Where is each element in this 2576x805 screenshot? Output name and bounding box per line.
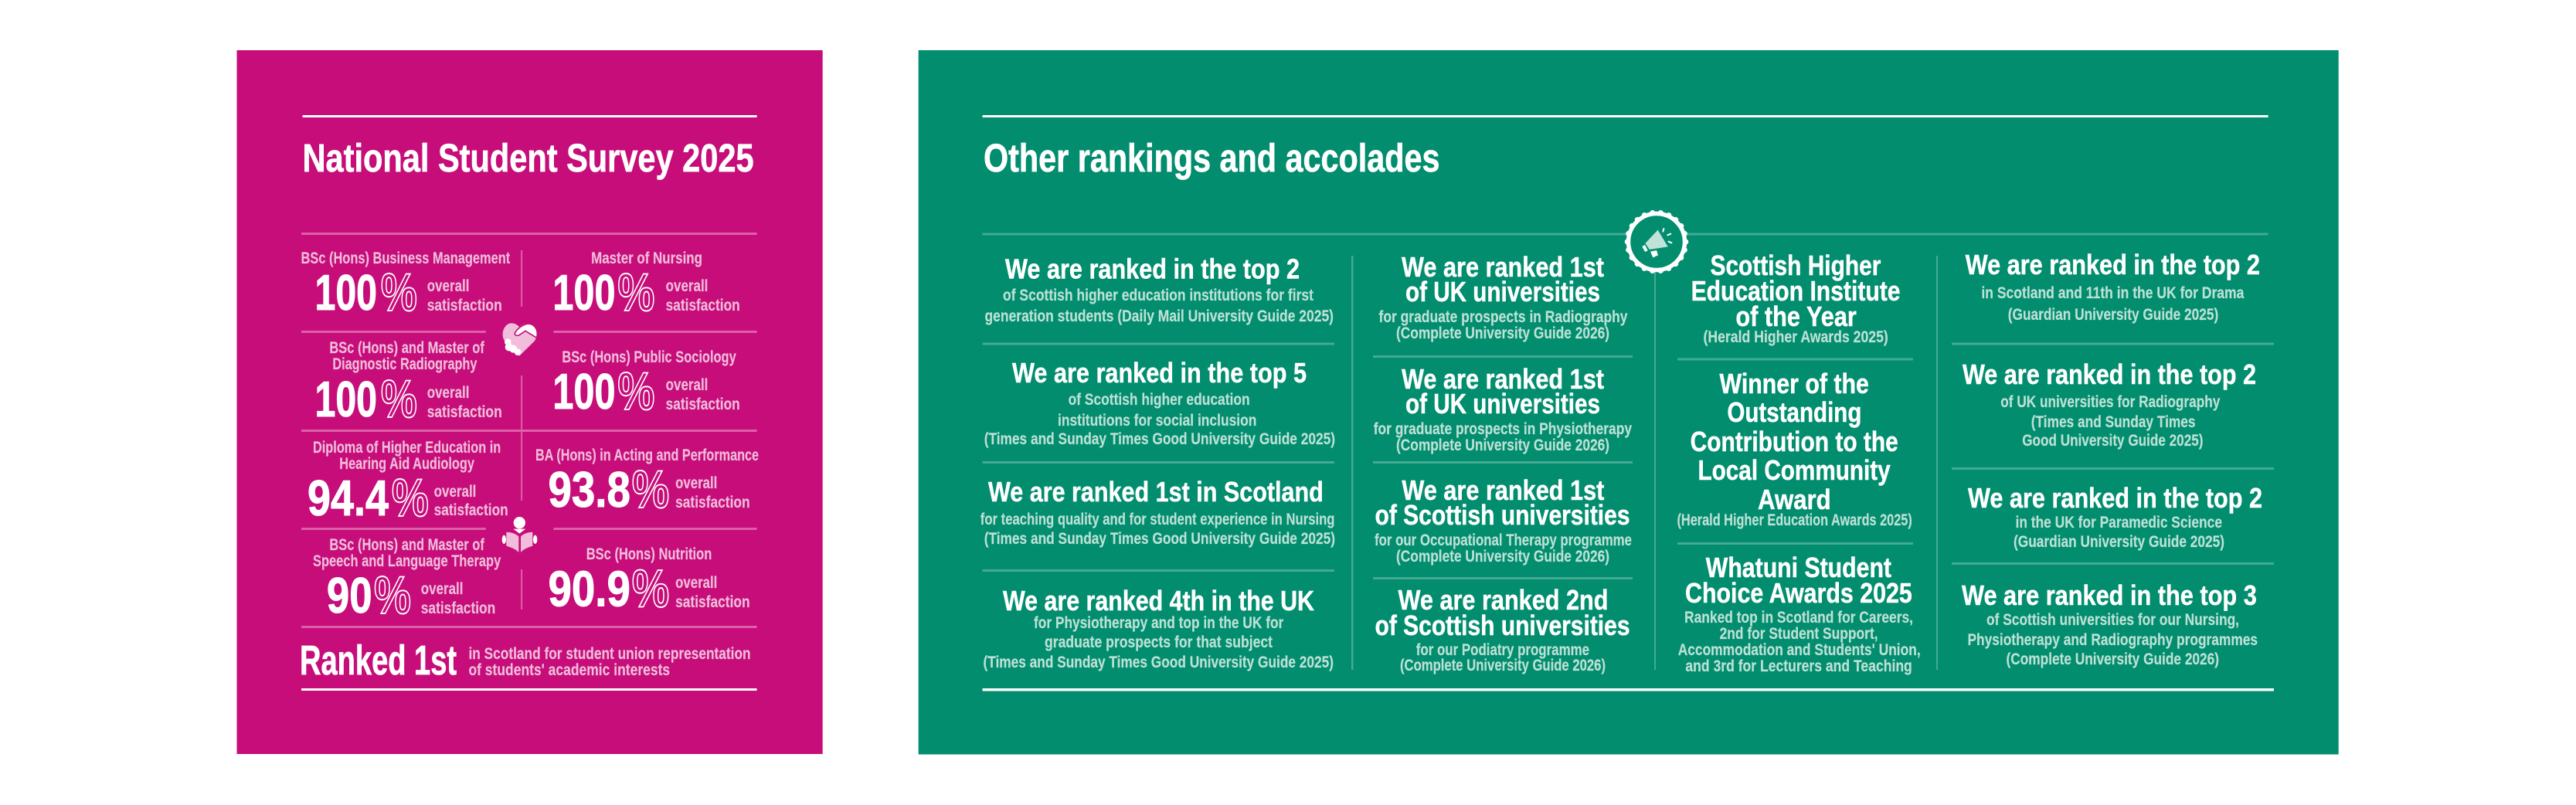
heading: Other rankings and accolades: Other rankings and accolades (984, 136, 1440, 180)
ranking: 1st UK Physiotherapy (1374, 363, 1632, 454)
ranking: 1st UK Physiotherapy: of UK universities (1405, 388, 1600, 419)
stat: Hearing Aid Audiology 94.4%: overall (434, 483, 476, 501)
ranking: top 3 Nursing, Physiotherapy and Radiography: (Complete University Guide 2026) (2006, 650, 2219, 668)
callout: Ranked 1st: in Scotland for student union representation (468, 645, 751, 663)
stat: Diagnostic Radiography 100%: overall (427, 384, 469, 402)
ranking: 1st UK Radiography: for graduate prospects in Radiography (1378, 308, 1628, 326)
ranking: 2nd Scottish Podiatry (1375, 584, 1630, 674)
stat: Diagnostic Radiography 100%: 100 (314, 371, 377, 427)
stat: Speech and Language Therapy 90%: overall (421, 580, 463, 598)
ranking: top 2 first generation (984, 253, 1334, 325)
award: Scottish Higher Education Institute of the Year: Scottish Higher (1711, 250, 1881, 281)
stat: Business Management 100%: satisfaction (427, 297, 502, 314)
award: Whatuni Student Choice Awards 2025: Whatuni Student (1706, 552, 1891, 583)
award: Scottish Higher Education Institute of the Year: of the Year (1735, 301, 1857, 332)
icon: handshake heart (503, 323, 537, 356)
ranking: top 2 first generation: of Scottish higher education institutions for first (1003, 287, 1313, 304)
ranking: top 3 Nursing, Physiotherapy and Radiography: We are ranked in the top 3 (1962, 579, 2257, 611)
stat: Public Sociology 100% (552, 348, 740, 421)
stat: Diagnostic Radiography 100%: % (381, 369, 417, 429)
ranking: top 2 Paramedic Science: in the UK for Paramedic Science (2015, 514, 2222, 532)
stat: Diagnostic Radiography 100%: Diagnostic Radiography (332, 355, 477, 373)
award: Whatuni Student Choice Awards 2025: Choice Awards 2025 (1685, 577, 1912, 609)
ranking: 1st in Scotland: We are ranked 1st in Scotland (988, 476, 1324, 508)
stat: Nutrition 90.9%: overall (675, 574, 717, 592)
ranking: 2nd Scottish Podiatry: (Complete University Guide 2026) (1400, 657, 1606, 674)
ranking: top 2 first generation: generation students (Daily Mail University Guide 2025) (984, 307, 1334, 325)
award: Outstanding Contribution to the Local Community: Award (1758, 484, 1831, 515)
stat: Hearing Aid Audiology 94.4%: satisfaction (434, 501, 508, 519)
ranking: top 2 Radiography (1963, 358, 2256, 450)
stat: Diagnostic Radiography 100%: BSc (Hons) and Master of (329, 339, 485, 357)
ranking: top 2 Radiography: Good University Guide 2025) (2022, 432, 2204, 450)
stat: Nutrition 90.9%: satisfaction (675, 593, 750, 611)
ranking: 4th in the UK (983, 585, 1334, 671)
ranking: 1st UK Radiography (1378, 251, 1628, 342)
ranking: 1st Scottish Occupational Therapy (1375, 474, 1632, 566)
ranking: 4th in the UK: graduate prospects for that subject (1045, 633, 1273, 651)
ranking: top 3 Nursing, Physiotherapy and Radiography (1962, 579, 2258, 668)
stat: Speech and Language Therapy 90%: 90 (327, 567, 372, 623)
award: Whatuni Student Choice Awards 2025: 2nd for Student Support, (1720, 625, 1878, 643)
award: Scottish Higher Education Institute of the Year: Education Institute (1691, 275, 1901, 307)
ranking: top 2 Radiography: (Times and Sunday Times (2031, 413, 2196, 431)
stat: Speech and Language Therapy 90%: % (374, 566, 411, 625)
stat: Public Sociology 100%: % (617, 362, 654, 421)
ranking: top 2 Drama: (Guardian University Guide 2025) (2008, 306, 2218, 324)
ranking: 1st Scottish Occupational Therapy: We are ranked 1st (1402, 474, 1604, 506)
award: Scottish Higher Education Institute of the Year (1691, 250, 1901, 346)
ranking: 1st in Scotland: for teaching quality and for student experience in Nursing (980, 511, 1335, 528)
ranking: 2nd Scottish Podiatry: for our Podiatry programme (1416, 641, 1589, 659)
stat: Master of Nursing 100%: % (617, 263, 654, 322)
stat: Master of Nursing 100% (552, 250, 740, 322)
award: Outstanding Contribution to the Local Community: Winner of the (1720, 368, 1869, 399)
award: Outstanding Contribution to the Local Community: Outstanding (1727, 396, 1861, 428)
stat: Nutrition 90.9%: % (632, 559, 669, 619)
stat: Acting and Performance 93.8%: 93.8 (548, 461, 630, 518)
stat: Hearing Aid Audiology 94.4%: Hearing Aid Audiology (339, 455, 474, 473)
ranking: top 2 Paramedic Science: (Guardian University Guide 2025) (2014, 533, 2224, 551)
award: Outstanding Contribution to the Local Community: (Herald Higher Education Awards 2025) (1677, 511, 1912, 529)
stat: Diagnostic Radiography 100% (314, 339, 502, 429)
callout: Ranked 1st: of students' academic interests (468, 661, 670, 679)
stat: Master of Nursing 100%: Master of Nursing (591, 250, 702, 267)
ranking: 1st Scottish Occupational Therapy: of Scottish universities (1375, 499, 1630, 531)
award: Whatuni Student Choice Awards 2025: Ranked top in Scotland for Careers, (1684, 609, 1913, 627)
stat: Business Management 100%: overall (427, 277, 469, 295)
ranking: top 5 social inclusion (984, 357, 1335, 448)
stat: Public Sociology 100%: 100 (552, 363, 616, 419)
stat: Master of Nursing 100%: satisfaction (666, 297, 740, 314)
stat: Public Sociology 100%: overall (666, 376, 708, 394)
ranking: top 2 Radiography: We are ranked in the top 2 (1963, 358, 2256, 390)
stat: Nutrition 90.9%: 90.9 (548, 560, 630, 617)
ranking: top 3 Nursing, Physiotherapy and Radiography: of Scottish universities for our Nursing, (1986, 611, 2239, 629)
award: Scottish Higher Education Institute of the Year: (Herald Higher Awards 2025) (1703, 328, 1888, 346)
stat: Hearing Aid Audiology 94.4%: Diploma of Higher Education in (313, 439, 501, 457)
stat: Diagnostic Radiography 100%: satisfaction (427, 403, 502, 421)
callout: Ranked 1st (300, 637, 751, 684)
ranking: 1st UK Physiotherapy: We are ranked 1st (1402, 363, 1604, 395)
ranking: 1st in Scotland (980, 476, 1335, 548)
ranking: 1st UK Physiotherapy: for graduate prospects in Physiotherapy (1374, 420, 1632, 438)
ranking: top 2 first generation: We are ranked in the top 2 (1005, 253, 1300, 284)
ranking: top 5 social inclusion: (Times and Sunday Times Good University Guide 2025) (984, 430, 1335, 448)
panel: National Student Survey (236, 50, 823, 754)
heading: National Student Survey 2025: National Student Survey 2025 (303, 136, 754, 180)
ranking: 1st UK Radiography: of UK universities (1405, 276, 1600, 307)
ranking: 4th in the UK: (Times and Sunday Times Good University Guide 2025) (983, 654, 1334, 671)
ranking: 2nd Scottish Podiatry: of Scottish universities (1375, 610, 1630, 641)
stat: Business Management 100% (301, 250, 510, 322)
award: Whatuni Student Choice Awards 2025: and 3rd for Lecturers and Teaching (1685, 657, 1912, 675)
stat: Master of Nursing 100%: overall (666, 277, 708, 295)
stat: Public Sociology 100%: BSc (Hons) Public Sociology (562, 348, 736, 366)
ranking: top 2 Drama (1966, 249, 2260, 324)
ranking: 1st UK Radiography: We are ranked 1st (1402, 251, 1604, 283)
ranking: 1st UK Physiotherapy: (Complete University Guide 2026) (1396, 436, 1609, 454)
ranking: top 3 Nursing, Physiotherapy and Radiography: Physiotherapy and Radiography programmes (1967, 631, 2258, 649)
ranking: 4th in the UK: for Physiotherapy and top in the UK for (1034, 614, 1283, 632)
ranking: top 5 social inclusion: of Scottish higher education (1069, 391, 1250, 409)
ranking: top 2 Paramedic Science: We are ranked in the top 2 (1968, 482, 2262, 514)
stat: Business Management 100%: BSc (Hons) Business Management (301, 250, 510, 267)
stat: Acting and Performance 93.8%: overall (675, 474, 717, 492)
stat: Acting and Performance 93.8%: satisfaction (675, 494, 750, 511)
stat: Speech and Language Therapy 90%: BSc (Hons) and Master of (329, 536, 485, 554)
stat: Hearing Aid Audiology 94.4%: % (392, 468, 429, 528)
stat: Speech and Language Therapy 90%: Speech and Language Therapy (313, 552, 501, 570)
stat: Nutrition 90.9% (548, 545, 750, 619)
stat: Speech and Language Therapy 90% (313, 536, 501, 625)
award: Outstanding Contribution to the Local Community (1677, 368, 1912, 529)
ranking: top 2 Paramedic Science (1968, 482, 2262, 551)
ranking: top 2 Radiography: of UK universities for Radiography (2000, 393, 2221, 411)
award: Whatuni Student Choice Awards 2025: Accommodation and Students' Union, (1678, 641, 1921, 659)
award: Outstanding Contribution to the Local Community: Contribution to the (1691, 426, 1898, 457)
panel: Other rankings and accolades (919, 50, 2339, 754)
stat: Master of Nursing 100%: 100 (552, 264, 616, 321)
icon: person reading book (502, 517, 537, 552)
ranking: top 5 social inclusion: We are ranked in the top 5 (1012, 357, 1307, 389)
award: Outstanding Contribution to the Local Community: Local Community (1698, 454, 1891, 486)
stat: Speech and Language Therapy 90%: satisfaction (421, 600, 495, 617)
callout: Ranked 1st: Ranked 1st (300, 637, 457, 684)
stat: Business Management 100%: 100 (314, 264, 377, 321)
ranking: 1st Scottish Occupational Therapy: (Complete University Guide 2026) (1396, 548, 1609, 566)
ranking: 1st in Scotland: (Times and Sunday Times Good University Guide 2025) (984, 530, 1335, 548)
award: Whatuni Student Choice Awards 2025 (1678, 552, 1921, 675)
stat: Business Management 100%: % (381, 263, 417, 322)
ranking: 1st Scottish Occupational Therapy: for our Occupational Therapy programme (1375, 532, 1632, 549)
ranking: 2nd Scottish Podiatry: We are ranked 2nd (1398, 584, 1609, 616)
icon: megaphone badge (1627, 212, 1686, 271)
stat: Hearing Aid Audiology 94.4% (308, 439, 508, 528)
ranking: top 2 Drama: in Scotland and 11th in the UK for Drama (1981, 284, 2245, 302)
ranking: top 2 Drama: We are ranked in the top 2 (1966, 249, 2260, 280)
stat: Acting and Performance 93.8%: % (632, 460, 669, 519)
stat: Hearing Aid Audiology 94.4%: 94.4 (308, 470, 389, 526)
stat: Public Sociology 100%: satisfaction (666, 396, 740, 413)
ranking: top 5 social inclusion: institutions for social inclusion (1058, 412, 1256, 430)
stat: Acting and Performance 93.8% (535, 447, 759, 519)
stat: Nutrition 90.9%: BSc (Hons) Nutrition (586, 545, 712, 563)
stat: Acting and Performance 93.8%: BA (Hons) in Acting and Performance (535, 447, 759, 464)
ranking: 4th in the UK: We are ranked 4th in the UK (1003, 585, 1315, 616)
ranking: 1st UK Radiography: (Complete University Guide 2026) (1396, 324, 1609, 342)
